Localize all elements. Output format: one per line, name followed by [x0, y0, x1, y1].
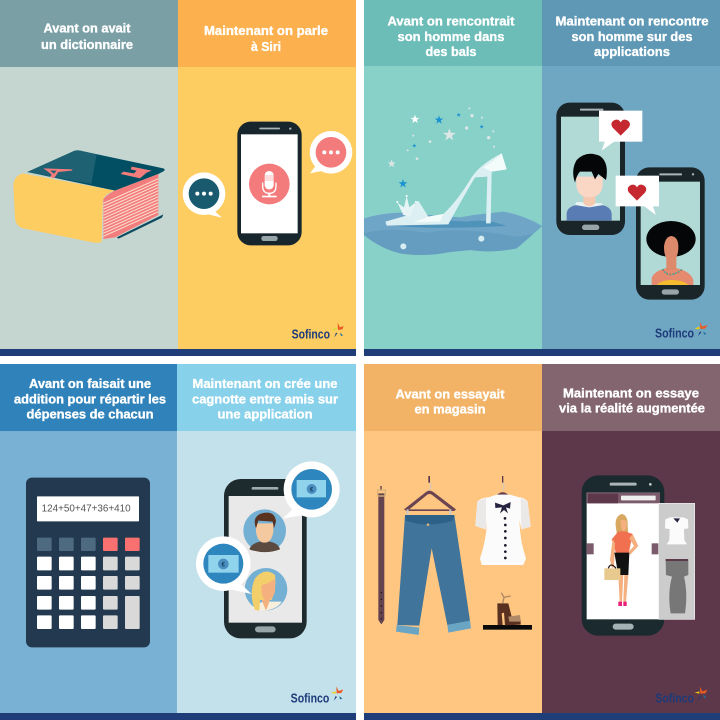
letter A [43, 168, 73, 178]
panel: bals vs applications [364, 0, 720, 356]
calculator display [37, 496, 139, 521]
logo: Sofinco: Sofinco [655, 326, 694, 341]
icon: phone with woman [636, 167, 705, 300]
icon: dictionary book [13, 150, 165, 243]
heading: maintenant cagnotte: cagnotte entre amis sur [192, 391, 338, 406]
icon: money bubble top [283, 461, 340, 519]
heading: avant dictionnaire: Avant on avait [44, 20, 131, 36]
avatar: man [243, 509, 286, 552]
heading: maintenant applications: son homme sur des [572, 29, 692, 44]
panel: magasin vs réalité augmentée [364, 364, 720, 720]
icon: phone with friends [224, 479, 307, 638]
panel: dictionary vs Siri [0, 0, 356, 356]
icon: speech bubble right [310, 131, 352, 174]
heading: maintenant applications: applications [594, 44, 670, 59]
panel: addition vs cagnotte [0, 364, 356, 720]
heading: avant addition: dépenses de chacun [26, 407, 154, 422]
icon: white blouse on hanger [475, 476, 531, 565]
heading: maintenant applications: Maintenant on rencontre [556, 14, 708, 28]
icon: phone with man [556, 103, 625, 235]
icon: money bubble top: € [310, 487, 314, 493]
heading: maintenant réalité augmentée: Maintenant on essaye [563, 386, 699, 400]
heading: avant bals: son homme dans [398, 29, 504, 44]
heading: avant bals: des bals [426, 44, 476, 59]
stars [411, 115, 419, 123]
cushion [364, 212, 542, 255]
logo: Sofinco: Sofinco [292, 326, 330, 341]
avatar: woman [245, 568, 287, 611]
heading: avant bals: Avant on rencontrait [388, 14, 515, 28]
icon: smartphone with microphone [237, 122, 302, 245]
icon: jeans on hanger [396, 476, 471, 635]
figure: woman [604, 514, 638, 606]
icon: belt [378, 486, 385, 624]
icon: phone with augmented reality fitting [582, 475, 695, 636]
icon: love bubble on first phone [599, 111, 642, 151]
heading: avant addition: addition pour répartir les [14, 391, 166, 406]
heading: maintenant Siri: Maintenant on parle [204, 23, 328, 38]
icon: sandal on shelf [483, 593, 532, 630]
icon: speech bubble left [183, 172, 225, 218]
icon: money bubble bottom: € [222, 562, 226, 568]
side panel with clothes [659, 503, 695, 619]
heading: avant magasin: Avant on essayait [396, 386, 505, 401]
heading: avant addition: Avant on faisait une [29, 376, 151, 391]
logo: Sofinco: Sofinco [655, 691, 694, 706]
heading: maintenant Siri: à Siri [251, 39, 281, 54]
heading: avant dictionnaire: un dictionnaire [41, 37, 133, 52]
icon: calculator: 124+50+47+36+410 [42, 503, 131, 514]
icon: money bubble bottom [196, 536, 252, 594]
letter Z [121, 167, 152, 178]
crown [397, 196, 416, 216]
logo: Sofinco: Sofinco [291, 690, 329, 705]
heading: maintenant réalité augmentée: via la réalité augmentée [559, 401, 705, 416]
icon: glass slipper on cushion [364, 107, 542, 255]
heading: maintenant cagnotte: Maintenant on crée une [192, 376, 338, 391]
slipper [385, 153, 507, 226]
heading: avant magasin: en magasin [414, 402, 486, 416]
icon: love bubble on second phone [616, 176, 659, 215]
icon: calculator [26, 478, 150, 647]
heading: maintenant cagnotte: une application [218, 407, 313, 422]
